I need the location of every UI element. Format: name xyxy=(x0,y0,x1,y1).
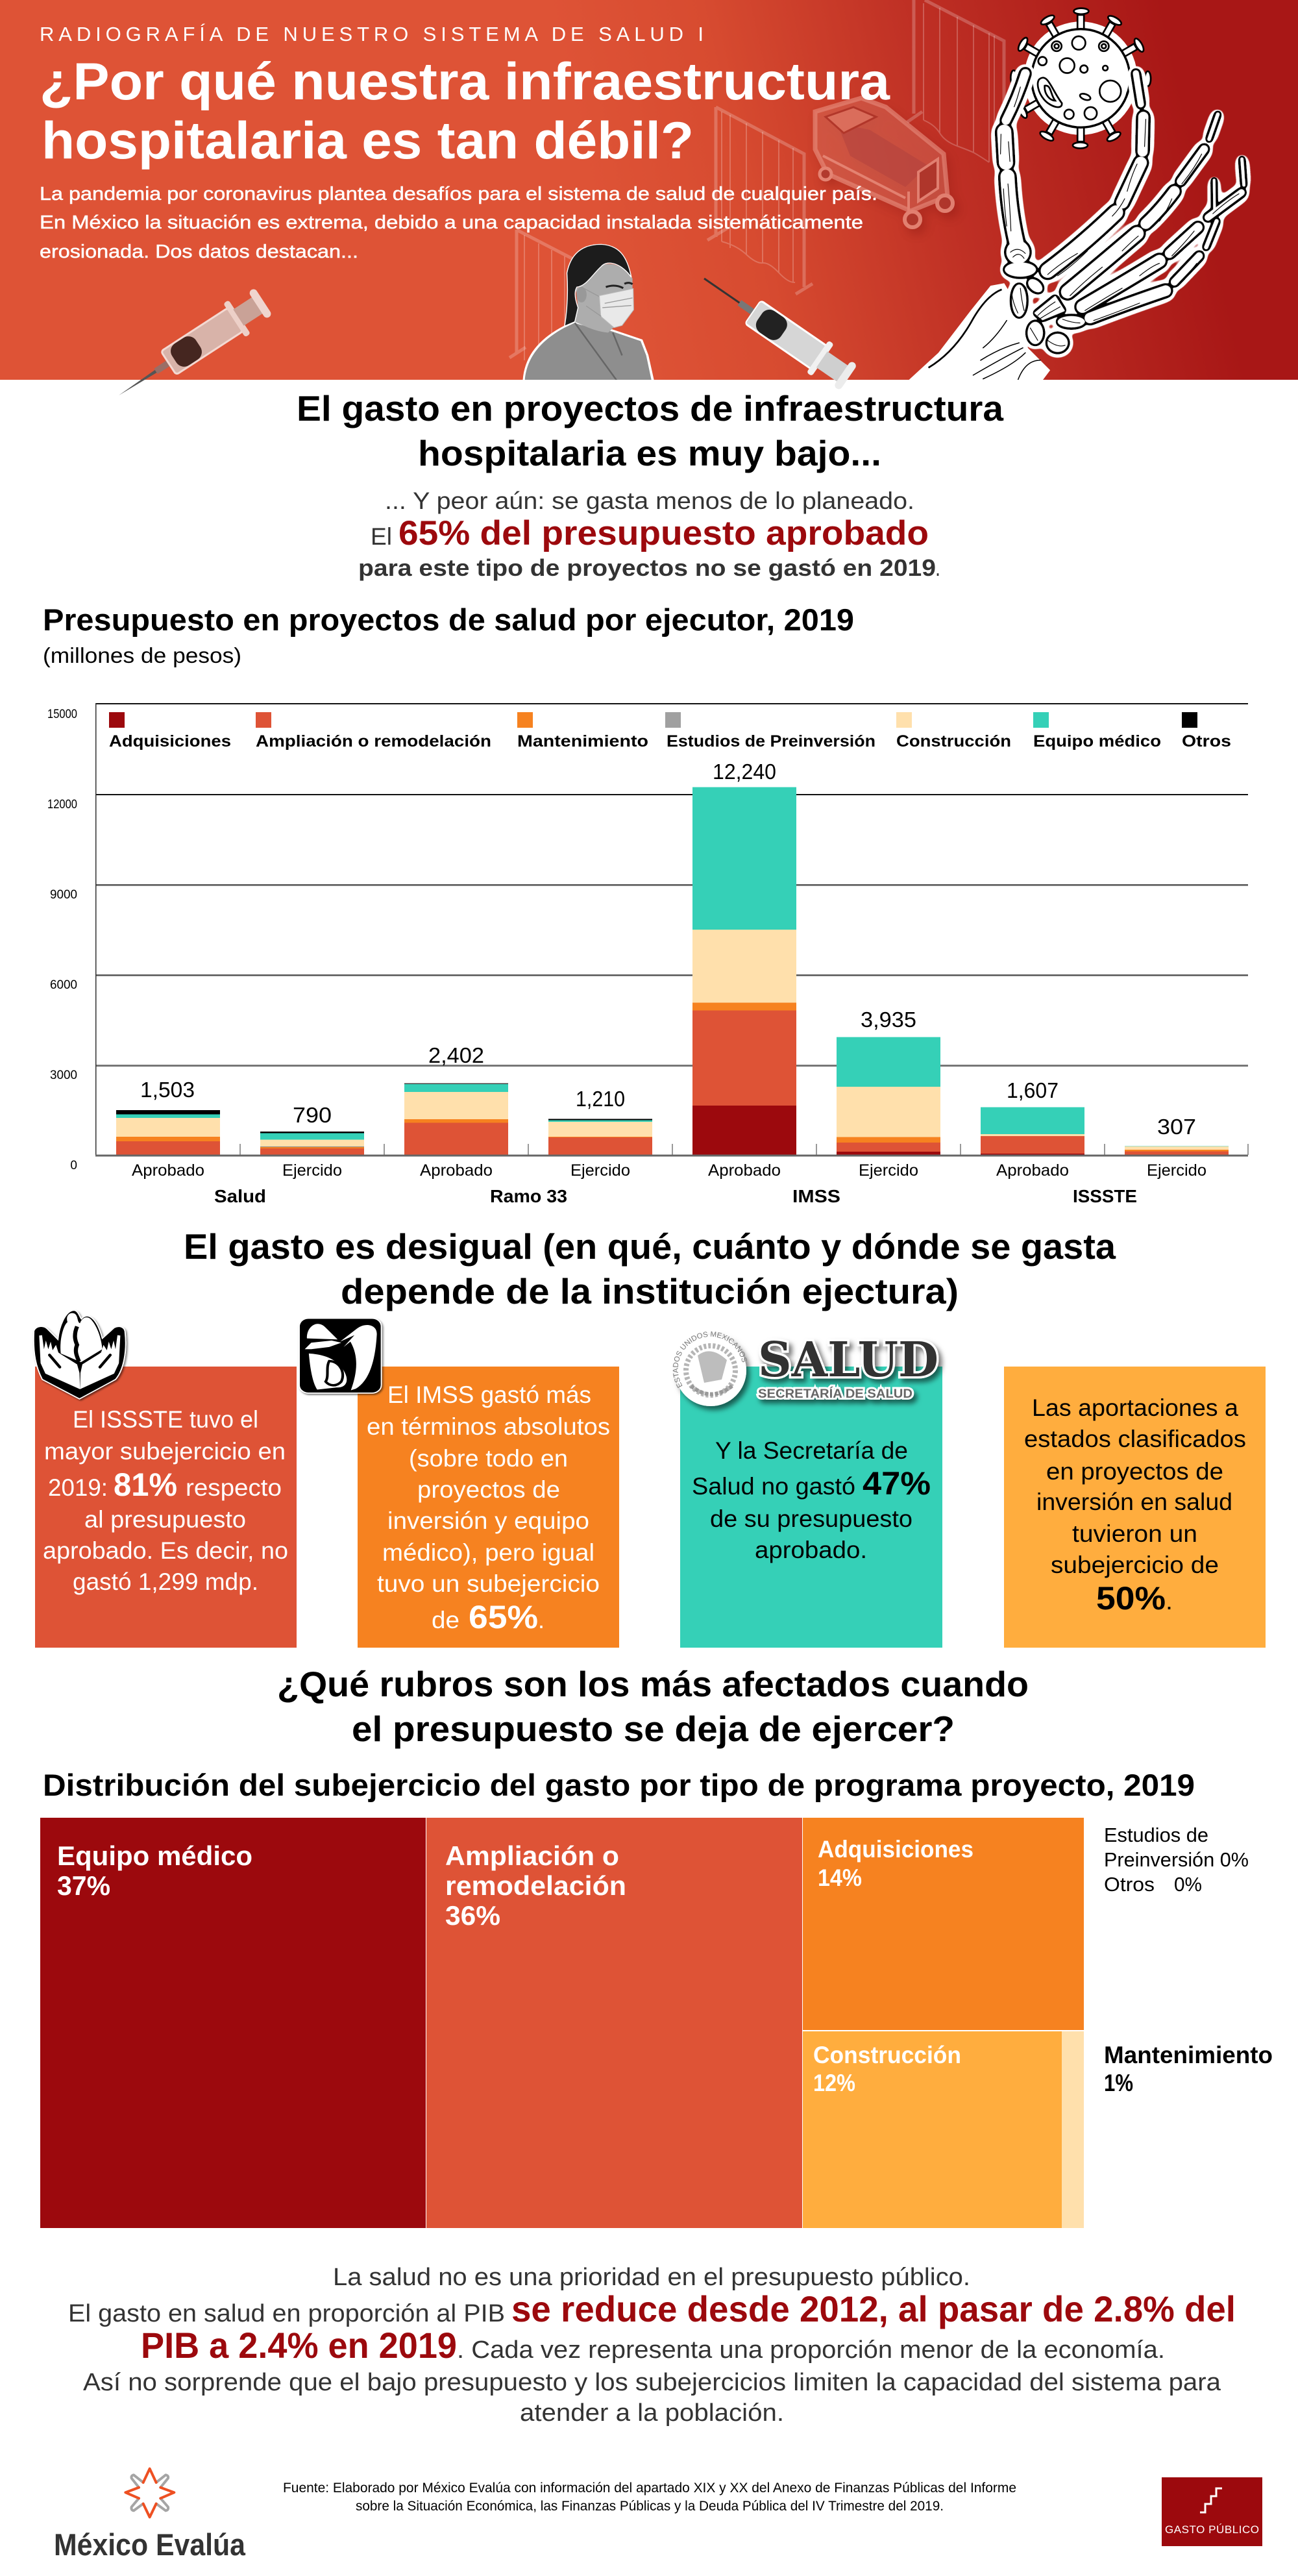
logo: Gasto Público: GASTO PÚBLICO xyxy=(1165,2523,1259,2536)
legend: Estudios de Preinversión xyxy=(667,732,876,750)
bar value labels: 307 xyxy=(1157,1115,1196,1139)
y axis labels: 12000 xyxy=(47,798,77,811)
card text: al presupuesto xyxy=(84,1506,246,1533)
heading: gasto bajo: El gasto en proyectos de infraestructura xyxy=(297,388,1003,428)
legend: Equipo médico xyxy=(1033,732,1161,750)
x axis labels: Aprobado xyxy=(420,1161,493,1180)
bone shading xyxy=(1001,87,1239,346)
closing text: se reduce desde 2012, al pasar de 2.8% del xyxy=(511,2288,1236,2329)
card text: gastó 1,299 mdp. xyxy=(73,1568,258,1595)
bar value labels: 12,240 xyxy=(713,760,776,784)
bar: Salud aprobado xyxy=(116,1110,220,1155)
bar: ISSSTE ejercido xyxy=(1125,1146,1229,1156)
card text: . xyxy=(538,1607,545,1633)
card text: de su presupuesto xyxy=(710,1505,912,1532)
card text: 47% xyxy=(863,1465,931,1502)
group labels: Salud xyxy=(214,1186,266,1206)
seal: ESTADOS UNIDOS MEXICANOS xyxy=(672,1331,752,1391)
illustration: skeleton hand xyxy=(909,73,1244,380)
tile: Equipo médico: 37% xyxy=(57,1870,110,1901)
bar value labels: 790 xyxy=(293,1103,332,1127)
key message 65%: . xyxy=(935,554,940,581)
x axis labels: Ejercido xyxy=(859,1161,918,1180)
x axis labels: Aprobado xyxy=(996,1161,1069,1180)
tile: Construcción: 12% xyxy=(813,2070,855,2096)
source note: Fuente: Elaborado por México Evalúa con información del apartado XIX y XX del Anexo de Finanzas Públicas del Informe xyxy=(283,2481,1016,2496)
card text: tuvo un subejercicio xyxy=(377,1570,600,1597)
source note: sobre la Situación Económica, las Finanzas Públicas y la Deuda Pública del IV Trimestre del 2019. xyxy=(356,2499,944,2514)
y axis labels: 0 xyxy=(70,1159,77,1172)
label: Mantenimiento: Mantenimiento xyxy=(1104,2042,1273,2068)
card: ISSSTE xyxy=(35,1367,297,1648)
treemap title: Distribución del subejercicio del gasto por tipo de programa proyecto, 2019 xyxy=(43,1768,1195,1802)
logo: IMSS xyxy=(299,1319,382,1393)
illustration: syringe left xyxy=(108,284,275,412)
forearm tendons xyxy=(974,321,1040,380)
card text: de xyxy=(432,1607,459,1633)
chart grid xyxy=(95,703,1248,1156)
bar value labels: 3,935 xyxy=(861,1008,916,1032)
legend: Construcción xyxy=(896,732,1011,750)
card text: El ISSSTE tuvo el xyxy=(73,1406,258,1433)
header banner xyxy=(0,0,1298,412)
tile: Ampliación o remodelación: Ampliación o xyxy=(445,1840,619,1871)
card text xyxy=(43,1406,288,1595)
card: aportaciones a estados xyxy=(1004,1367,1266,1648)
tile: Adquisiciones xyxy=(803,1818,1084,2030)
tile: Ampliación o remodelación: remodelación xyxy=(445,1870,626,1901)
x axis labels: Aprobado xyxy=(132,1161,204,1180)
header intro text xyxy=(40,184,877,262)
label: Estudios y Otros: 0% xyxy=(1174,1873,1202,1896)
card text: aprobado. Es decir, no xyxy=(43,1537,288,1564)
chart title xyxy=(43,602,854,667)
virus spikes xyxy=(1010,8,1151,148)
group labels: ISSSTE xyxy=(1073,1186,1137,1206)
header title xyxy=(40,53,890,170)
header background xyxy=(0,0,1298,380)
card text: Y la Secretaría de xyxy=(715,1437,908,1464)
tile: Construcción: Construcción xyxy=(813,2042,961,2068)
x axis labels: Ejercido xyxy=(282,1161,342,1180)
card text: subejercicio de xyxy=(1051,1552,1219,1578)
tile: Ampliación o remodelación xyxy=(426,1818,802,2228)
bar: IMSS ejercido xyxy=(837,1037,940,1156)
virus craters xyxy=(1033,36,1127,127)
x axis labels: Aprobado xyxy=(708,1161,781,1180)
x axis labels xyxy=(132,1161,1206,1180)
header title: hospitalaria es tan débil? xyxy=(42,112,694,170)
legend: Mantenimiento xyxy=(517,732,648,750)
closing text: atender a la población. xyxy=(520,2399,784,2427)
card text: inversión en salud xyxy=(1036,1489,1232,1515)
logo: México Evalúa: México Evalúa xyxy=(54,2527,246,2562)
header title: ¿Por qué nuestra infraestructura xyxy=(40,53,890,111)
closing text: El gasto en salud en proporción al PIB xyxy=(68,2300,505,2327)
baseline xyxy=(95,1154,1248,1157)
forearm xyxy=(909,283,1050,380)
card text: 81% xyxy=(114,1467,177,1503)
label: Mantenimiento xyxy=(1104,2042,1273,2096)
heading: gasto bajo: hospitalaria es muy bajo... xyxy=(418,433,881,473)
wordmark: SALUD xyxy=(758,1332,938,1388)
card text: mayor subejercicio en xyxy=(44,1438,286,1465)
wordmark: SECRETARÍA DE SALUD xyxy=(758,1387,912,1401)
bar value labels: 1,607 xyxy=(1007,1078,1059,1102)
y axis labels: 9000 xyxy=(50,888,77,902)
closing text: . Cada vez representa una proporción menor de la economía. xyxy=(457,2336,1165,2364)
tile: Ampliación o remodelación: 36% xyxy=(445,1900,500,1931)
card text: respecto xyxy=(186,1474,282,1501)
bar: ISSSTE aprobado xyxy=(981,1108,1084,1156)
heading: rubros afectados: ¿Qué rubros son los más afectados cuando xyxy=(277,1664,1029,1704)
x axis labels: Ejercido xyxy=(1147,1161,1206,1180)
treemap xyxy=(40,1818,1273,2228)
card text: inversión y equipo xyxy=(387,1507,589,1534)
card text: estados clasificados xyxy=(1024,1426,1246,1452)
heading: rubros afectados: el presupuesto se deja de ejercer? xyxy=(352,1709,955,1749)
key message 65% xyxy=(358,488,940,581)
eyebrow: RADIOGRAFÍA DE NUESTRO SISTEMA DE SALUD I xyxy=(40,23,704,45)
card text: (sobre todo en xyxy=(409,1445,568,1472)
heading: gasto desigual: El gasto es desigual (en qué, cuánto y dónde se gasta xyxy=(184,1226,1116,1267)
card: IMSS xyxy=(358,1367,619,1648)
illustration: syringe right xyxy=(693,262,860,394)
logo: Gasto Público xyxy=(1162,2477,1262,2546)
closing text xyxy=(68,2264,1236,2427)
tile: Equipo médico: Equipo médico xyxy=(57,1840,252,1871)
legend: Otros xyxy=(1182,732,1231,750)
closing text: PIB a 2.4% en 2019 xyxy=(141,2325,457,2366)
logo: Secretaría de Salud xyxy=(672,1331,946,1414)
illustration: hospital curtains xyxy=(509,0,1004,380)
card text: en proyectos de xyxy=(1046,1458,1223,1485)
card text: El IMSS gastó más xyxy=(387,1381,591,1408)
tile: Adquisiciones: 14% xyxy=(818,1864,862,1891)
key message 65%: El xyxy=(371,523,392,550)
card text: aprobado. xyxy=(755,1537,867,1563)
y axis labels: 15000 xyxy=(47,708,77,721)
card text: médico), pero igual xyxy=(382,1539,594,1566)
chart title: Presupuesto en proyectos de salud por ejecutor, 2019 xyxy=(43,602,854,637)
closing text: Así no sorprende que el bajo presupuesto y los subejercicios limiten la capacidad del sistema para xyxy=(83,2369,1221,2396)
group labels xyxy=(214,1186,1137,1206)
source note xyxy=(283,2481,1016,2514)
logo: México Evalúa xyxy=(54,2469,246,2562)
card text: 65% xyxy=(469,1599,538,1635)
card: Secretaría de Salud xyxy=(680,1367,942,1648)
card text: Salud no gastó xyxy=(692,1473,855,1500)
card text: en términos absolutos xyxy=(367,1413,610,1440)
tile: Construcción xyxy=(803,2031,1062,2228)
legend: Ampliación o remodelación xyxy=(256,732,491,750)
illustration: nurse xyxy=(524,244,654,381)
card text: Las aportaciones a xyxy=(1032,1394,1238,1421)
card text xyxy=(367,1381,610,1635)
illustration: virus xyxy=(1010,8,1151,148)
card text: proyectos de xyxy=(417,1476,560,1503)
card text xyxy=(1024,1394,1246,1616)
card text: . xyxy=(1166,1588,1173,1615)
seal xyxy=(672,1331,753,1414)
heading: gasto bajo xyxy=(297,388,1003,473)
card text: 50% xyxy=(1096,1580,1166,1616)
heading: gasto desigual: depende de la institución ejectura) xyxy=(341,1271,959,1311)
legend: Adquisiciones xyxy=(109,732,231,750)
key message 65%: 65% del presupuesto aprobado xyxy=(398,514,929,552)
y axis labels: 6000 xyxy=(50,978,77,992)
label: Mantenimiento: 1% xyxy=(1104,2070,1133,2096)
y axis labels: 3000 xyxy=(50,1069,77,1082)
bar: Salud ejercido xyxy=(260,1132,364,1155)
bar value labels: 1,210 xyxy=(576,1087,625,1111)
illustration: hospital bed xyxy=(815,98,953,227)
header intro text: En México la situación es extrema, debido a una capacidad instalada sistemáticamente xyxy=(40,212,863,233)
key message 65%: ... Y peor aún: se gasta menos de lo planeado. xyxy=(385,488,914,514)
label: Estudios y Otros: Preinversión 0% xyxy=(1104,1848,1249,1871)
bar value labels: 1,503 xyxy=(140,1078,195,1102)
stacked bar chart xyxy=(47,703,1248,1206)
tile: Mantenimiento xyxy=(1062,2031,1084,2228)
heading: rubros afectados xyxy=(277,1664,1029,1749)
legend xyxy=(109,712,1231,750)
label: Estudios y Otros: Estudios de xyxy=(1104,1824,1208,1846)
header intro text: La pandemia por coronavirus plantea desafíos para el sistema de salud de cualquier país. xyxy=(40,184,877,204)
star symbol xyxy=(125,2469,174,2517)
group labels: Ramo 33 xyxy=(490,1186,567,1206)
key message 65%: para este tipo de proyectos no se gastó en 2019 xyxy=(358,554,936,581)
label: Estudios y Otros: Otros xyxy=(1104,1873,1155,1896)
chart title: (millones de pesos) xyxy=(43,643,241,667)
tile: Equipo médico xyxy=(40,1818,426,2228)
y axis labels xyxy=(47,708,77,1172)
logo: ISSSTE xyxy=(34,1310,126,1399)
bar: IMSS aprobado xyxy=(692,787,796,1156)
x axis labels: Ejercido xyxy=(570,1161,630,1180)
label: Estudios y Otros xyxy=(1104,1824,1249,1896)
tile: Adquisiciones: Adquisiciones xyxy=(818,1836,974,1863)
bar: Ramo 33 ejercido xyxy=(548,1119,652,1156)
card text: tuvieron un xyxy=(1072,1520,1197,1547)
closing text: La salud no es una prioridad en el presupuesto público. xyxy=(333,2264,970,2291)
bar value labels xyxy=(140,760,1196,1139)
bar: Ramo 33 aprobado xyxy=(404,1083,508,1155)
bar value labels: 2,402 xyxy=(428,1043,484,1067)
header intro text: erosionada. Dos datos destacan... xyxy=(40,242,358,262)
heading: gasto desigual xyxy=(184,1226,1116,1311)
group labels: IMSS xyxy=(792,1186,840,1206)
card text: 2019: xyxy=(48,1474,108,1501)
card text xyxy=(692,1437,931,1563)
